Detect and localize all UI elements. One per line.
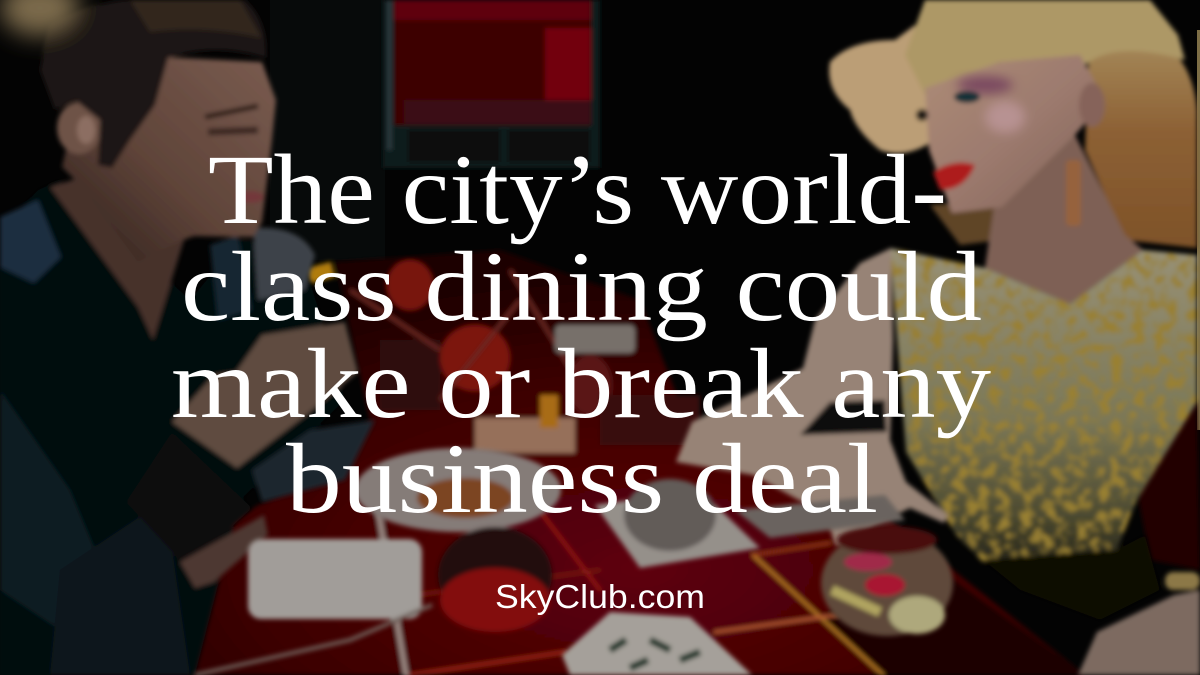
red ornaments: [387, 260, 433, 310]
headline: class dining could: [181, 231, 982, 342]
neon table lines: [379, 515, 883, 675]
man neck and face: [50, 165, 205, 340]
cocktail glass: [821, 530, 953, 636]
grey cushion: [253, 228, 315, 300]
woman hair back: [1085, 18, 1197, 248]
bottom plate with salad: [562, 612, 752, 675]
dress shadow: [983, 535, 1160, 620]
woman neck: [985, 135, 1143, 304]
headline: make or break any: [171, 328, 991, 439]
woman lips: [933, 163, 975, 190]
woman ear and earring: [1079, 83, 1105, 127]
woman dress: [890, 248, 1197, 562]
photo: woman: [676, 0, 1200, 675]
food tray: [475, 418, 575, 453]
background glow: [0, 0, 80, 36]
photo: tableware: [195, 448, 953, 675]
woman eye: [954, 91, 980, 103]
glassware and clutter: [380, 340, 440, 410]
man jacket and torso: [0, 180, 345, 675]
photo: table: [190, 250, 1200, 675]
photo: man: [0, 0, 375, 675]
bowl with food: [355, 448, 561, 532]
photo: restaurant cabinet: [383, 0, 600, 168]
red bowl: [438, 527, 552, 623]
fork: [195, 605, 432, 675]
source credit: SkyClub.com: [495, 578, 705, 615]
woman face: [925, 55, 1105, 213]
man hair: [40, 0, 266, 168]
woman other hand: [1078, 590, 1200, 675]
square plate and bowl: [595, 490, 760, 568]
white plate: [248, 539, 422, 619]
headline: [171, 134, 991, 534]
headline: business deal: [286, 423, 878, 534]
woman arm and hand: [676, 248, 948, 545]
man shirt collar: [0, 200, 61, 283]
headline: The city’s world-: [208, 134, 947, 245]
man hand with drink: [172, 322, 358, 468]
